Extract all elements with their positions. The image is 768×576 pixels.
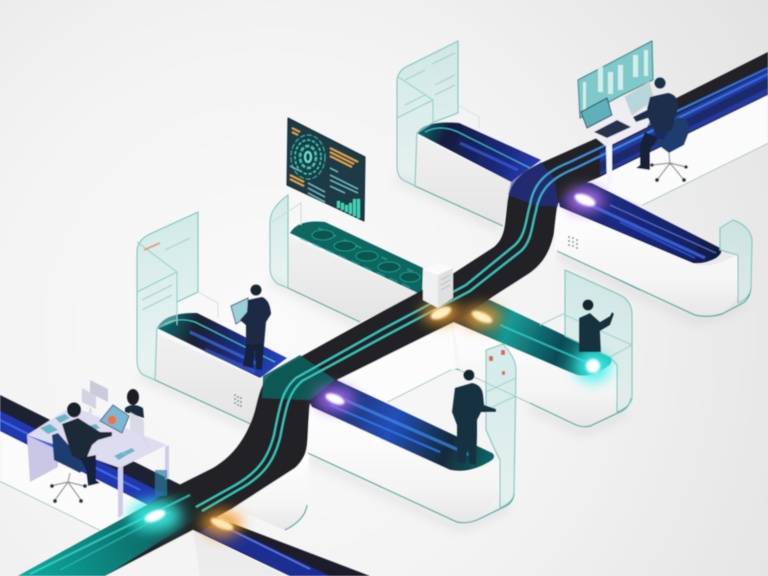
outline teal bases [155,186,751,530]
glass panel: third block [540,270,632,412]
woman colleague [125,389,144,418]
conveyor: middle teal platform [290,221,423,295]
seated man at desk [62,402,112,486]
wall: curved wall behind third conveyor [491,235,555,322]
seated man [633,78,678,170]
dashboard panel [287,118,365,221]
road green crossing [262,355,335,400]
dot grid: right block [568,236,578,249]
blue readouts [290,166,358,202]
laptop right [625,82,654,115]
wall: upper-left block [415,135,511,226]
wall: curved junction block [233,452,309,530]
glass panel: upper-left block [397,41,479,186]
glow: orange centre right light [463,306,501,328]
wall: lower-left platform [0,432,148,530]
conveyor: upper right cross [554,180,721,263]
monitor on desk [130,412,148,448]
wall: right long block [554,207,738,316]
dot grid: left block [234,394,242,407]
conveyor: long blue [300,380,494,471]
wall: left block [155,333,262,425]
chair at desk [50,433,95,503]
road blue upper section [600,70,768,175]
wall: third block [453,322,617,427]
floor outlines [0,143,768,530]
floor shadows [140,178,745,527]
wall: bottom corner block [105,530,200,576]
desk tiles [40,414,135,460]
glass panel: long block end [486,344,516,508]
person with tablet [231,284,271,370]
conveyor: lower right [193,511,370,576]
conveyor: third teal [453,300,612,376]
desk [577,100,655,147]
glass panel: middle block [270,195,301,288]
conveyor: upper left [417,122,541,182]
wall: inner white return [337,321,456,402]
server box [423,263,453,308]
desk side panel [27,435,58,482]
mini bar chart [337,199,360,218]
road teal section [18,490,210,576]
desk top [27,406,167,468]
orange readouts [290,128,358,186]
glass panel: upper right end [720,220,752,303]
wall: middle teal block [288,236,422,322]
office chair [645,118,689,182]
wall: long blue block [308,407,500,523]
desk legs [118,445,169,518]
glass panel: left block [137,212,218,380]
glow: orange lower light [202,511,242,537]
glow: orange centre left light [422,302,460,324]
conveyor: lower left [0,395,187,505]
conveyors [0,122,721,576]
big chart screen [578,41,653,118]
person at glass, long block [452,370,496,465]
wall: upper-right platform [591,95,768,205]
glow: purple upper light [566,188,604,212]
conveyor lines [0,128,716,569]
monitors back [82,380,108,414]
laptop left [581,98,631,138]
radar dial [291,135,325,179]
glow: cyan end light [575,350,611,382]
laptop with orange circle [100,405,129,433]
middle platform cells [312,230,420,282]
bottle by conveyor [155,470,167,496]
workstation: lower left [27,380,169,518]
person at glass, third block [579,300,614,352]
workstation: upper right [577,41,689,187]
glow: cyan start light [129,500,181,532]
red alert marks [489,350,505,375]
conveyor: left [157,313,287,378]
road blue crossing [508,162,558,207]
glow: purple middle light [316,387,354,411]
